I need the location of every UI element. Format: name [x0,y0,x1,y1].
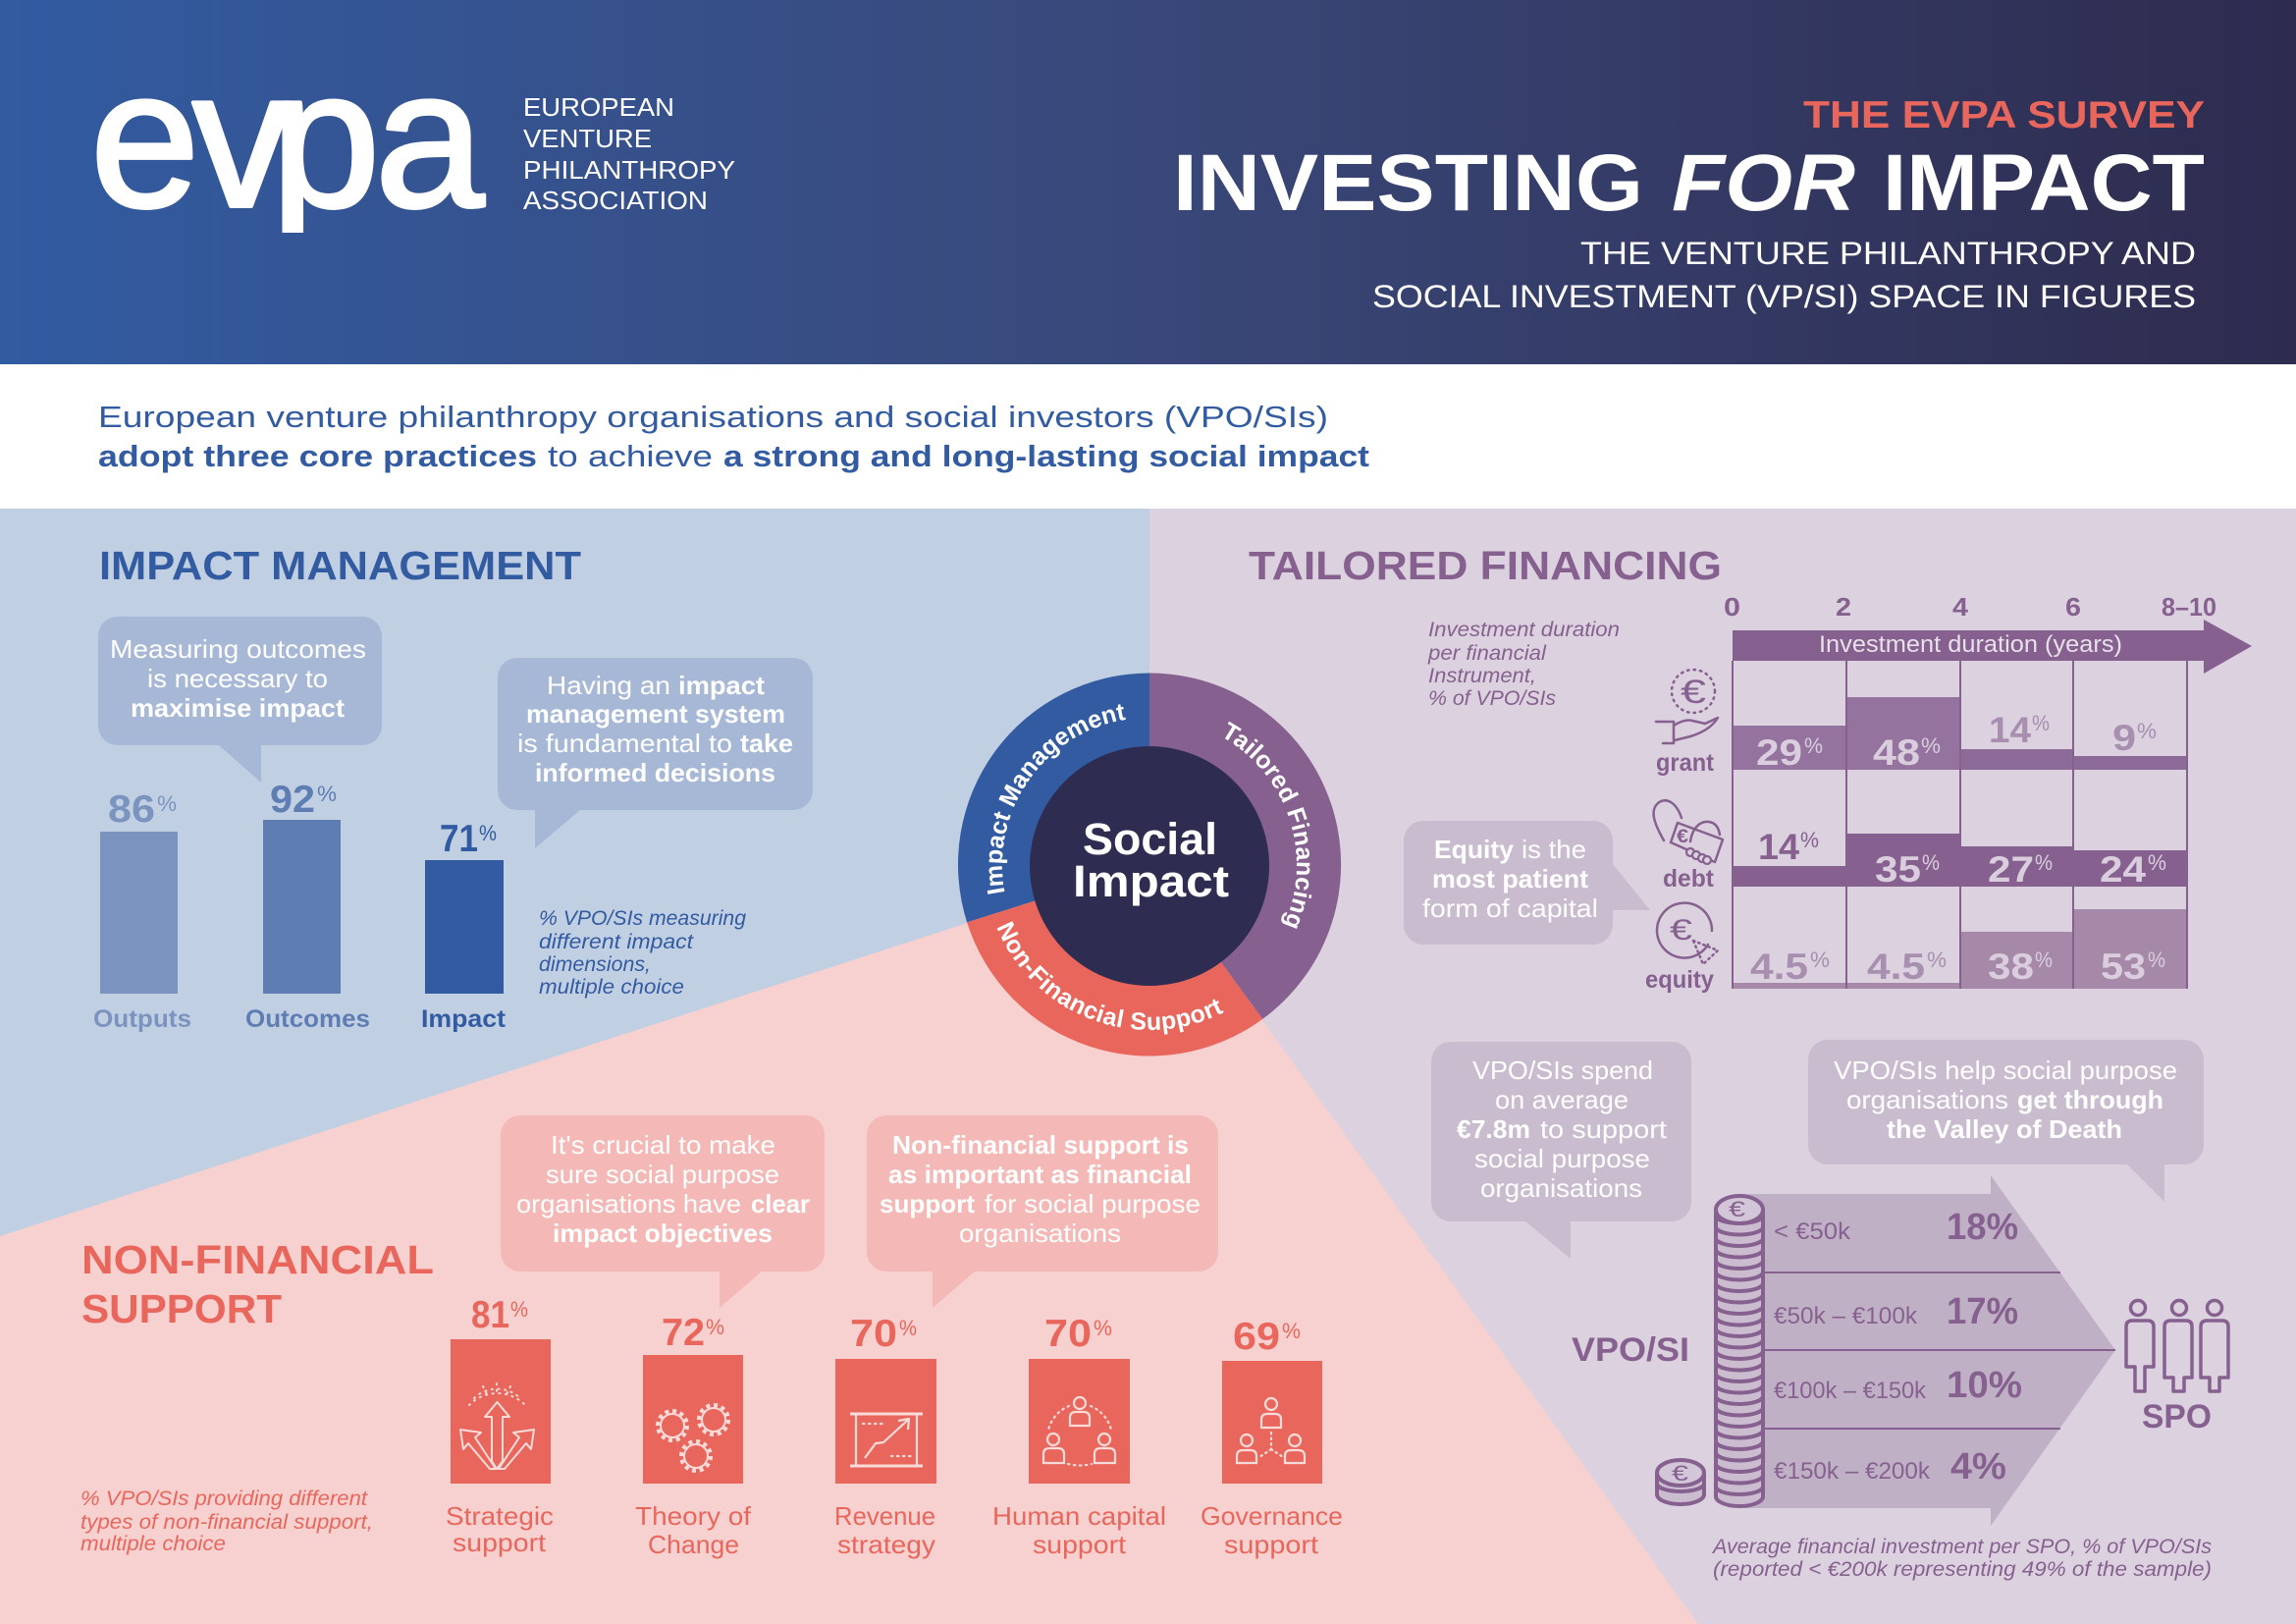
label: VPO/SI: VPO/SI [1572,1331,1689,1369]
callout: clear impact objectives: It's crucial to make [551,1130,775,1160]
heat table: duration by instrument: % [2148,850,2166,875]
heading: non-financial support: SUPPORT [81,1286,282,1331]
callout: equity patient capital: Equity [1434,835,1515,864]
bar: outputs 86%: 86 [108,788,155,831]
heading: tailored financing: TAILORED FINANCING [1249,543,1722,588]
heading: impact management: IMPACT MANAGEMENT [99,543,581,588]
callout: measuring outcomes: is necessary to [147,664,328,693]
callout: measuring outcomes: Measuring outcomes [110,634,366,664]
logo caption: VENTURE [523,124,652,153]
bar: outcomes 92% [245,779,370,1033]
chart note: multiple choice [539,976,684,999]
callout: non-financial importance: for social purpose [985,1189,1201,1218]
chart note: average investment: (reported < €200k representing 49% of the sample) [1713,1558,2212,1581]
centre: social impact [1030,746,1269,986]
callout: average spend: social purpose [1474,1144,1650,1173]
investment bands: €150k – €200k [1774,1458,1931,1485]
investment bands: €100k – €150k [1774,1378,1927,1404]
bar: theory of change 72%: Change [648,1530,739,1559]
heat table: duration by instrument: % [1922,850,1940,875]
logo caption: ASSOCIATION [523,186,708,215]
row label: grant [1656,670,1718,777]
bar chart: impact dimensions [93,779,507,1033]
header band [0,0,2296,364]
intro statement: to achieve [548,439,713,473]
ring segment: impact management: Impact Management [988,704,1126,894]
bar: revenue strategy 70%: strategy [837,1530,935,1559]
callout: average spend: organisations [1480,1173,1642,1203]
icon: tall coin stack [1716,1196,1763,1506]
values: equity: 38 [1988,947,2034,987]
icon: coin over hand: € [1681,674,1706,711]
bar: impact 71%: Impact [421,1005,507,1033]
bar: strategic support 81%: 81 [471,1294,509,1336]
heat table: duration by instrument: % [2137,719,2157,743]
callout: equity patient capital [1404,821,1650,945]
bar: human capital support 70%: 70 [1044,1313,1092,1355]
icon: governance hierarchy [1237,1398,1305,1463]
callout: impact management system: Having an [547,671,670,700]
heat table: duration by instrument: % [1800,828,1819,852]
heat table: duration by instrument [1733,661,2187,989]
arrow: investment duration [1733,620,2252,674]
subtitle: SOCIAL INVESTMENT (VP/SI) SPACE IN FIGURES [1372,279,2196,314]
callout: non-financial importance [867,1115,1218,1308]
row label: debt [1654,800,1723,893]
values: grant: 48 [1873,732,1920,773]
bar: governance support 69%: Governance [1201,1501,1343,1531]
callout: non-financial importance: as important as financial [888,1160,1192,1189]
values: grant: 9 [2112,718,2136,758]
callout: non-financial importance: Non-financial support is [892,1130,1189,1160]
intro statement: a strong and long-lasting social impact [723,439,1369,473]
bar: impact 71%: % [479,821,497,845]
subtitle: THE VENTURE PHILANTHROPY AND [1580,236,2196,271]
row fills: grant [1733,697,2187,770]
bar: strategic support 81% [446,1294,554,1557]
values: equity: 53 [2101,947,2146,987]
bar: governance support 69% [1201,1316,1343,1559]
table note: % of VPO/SIs [1428,687,1556,710]
callout: average spend: VPO/SIs spend [1472,1056,1653,1085]
intro statement [98,400,1369,473]
icon: euro pie: € [1670,914,1692,947]
chart note: multiple choice [80,1533,226,1555]
callout: average spend: to support [1540,1114,1668,1144]
icon: handshake with note: € [1677,827,1688,847]
logo: evpa wordmark: evpa [90,29,485,248]
callout: valley of death: organisations [1846,1085,2008,1114]
intro statement: European venture philanthropy organisations and social investors (VPO/SIs) [98,400,1328,434]
callout: clear impact objectives: impact objectives [553,1218,773,1248]
bar: human capital support 70%: % [1094,1316,1112,1340]
title: INVESTING [1173,138,1643,228]
investment bands [1774,1207,2022,1488]
row label: equity: equity [1645,966,1714,994]
values: debt: 35 [1875,849,1921,890]
ring segment: tailored financing [1149,674,1341,1019]
bar: human capital support 70%: support [1033,1530,1127,1559]
investment bands: < €50k [1774,1218,1851,1245]
chart note: average investment [1711,1536,2213,1581]
icon: gears [658,1405,728,1471]
table note: per financial [1427,642,1547,665]
bar: outputs 86%: Outputs [93,1005,191,1033]
callout: average spend: €7.8m [1457,1114,1530,1144]
icon: small coin stack: € [1672,1461,1688,1486]
icon: diverging arrows [460,1383,534,1469]
bar: strategic support 81%: Strategic [446,1501,554,1531]
values: debt [1758,827,2146,890]
values: equity: 4.5 [1750,947,1808,987]
panel: tailored financing [1149,509,2296,1624]
ring segment: non-financial support: Non-Financial Support [997,921,1224,1035]
bar: theory of change 72%: 72 [662,1312,705,1354]
arrow: investment size flow [1740,1175,2115,1526]
investment bands: 18% [1947,1207,2018,1248]
bar: outcomes 92%: 92 [270,779,315,821]
chart note [80,1488,373,1555]
callout: equity patient capital: most patient [1432,864,1588,893]
values: debt: 27 [1988,849,2034,890]
heat table: duration by instrument: % [1810,947,1830,972]
icon: small coin stack [1657,1460,1704,1504]
logo caption: PHILANTHROPY [523,155,735,185]
investment bands: 4% [1950,1446,2006,1488]
subtitle [1372,236,2196,314]
bar: revenue strategy 70% [834,1313,936,1559]
table note [1427,619,1620,710]
bar: theory of change 72% [635,1312,752,1559]
row fills: equity [1733,909,2187,989]
chart note: dimensions, [539,953,651,976]
callout: clear impact objectives: sure social purpose [546,1160,779,1189]
title [1173,138,2205,228]
callout: impact management system: take [740,729,793,758]
bar: governance support 69%: support [1224,1530,1319,1559]
panel: non-financial support [0,864,1698,1624]
bar: strategic support 81%: % [510,1297,528,1322]
heat table: duration by instrument: % [2148,947,2165,972]
duration axis labels: 2 [1836,592,1851,622]
values: debt: 14 [1758,827,1799,867]
values: grant [1756,710,2136,773]
callout: impact management system: informed decisions [535,758,775,787]
logo caption: EUROPEAN [523,92,674,122]
callout: impact management system [498,658,813,848]
row label: grant: grant [1656,749,1715,777]
callout: equity patient capital: form of capital [1422,893,1598,923]
bar: revenue strategy 70%: % [899,1316,917,1340]
arrow: investment duration: Investment duration (years) [1819,631,2122,658]
callout: valley of death [1808,1040,2204,1202]
title: FOR [1672,138,1855,228]
callout: non-financial importance: support [880,1189,975,1218]
callout: clear impact objectives: clear [751,1189,810,1218]
callout: valley of death: the Valley of Death [1887,1114,2122,1144]
chart note: % VPO/SIs measuring [539,907,746,930]
table note: Investment duration [1428,619,1620,641]
duration axis labels: 4 [1952,592,1969,622]
heading: non-financial support [81,1237,434,1331]
intro statement: adopt three core practices [98,439,537,473]
heat table: duration by instrument: % [1921,733,1941,758]
heat table: duration by instrument: % [1927,947,1947,972]
bar: outcomes 92%: Outcomes [245,1005,370,1033]
icon: three people [2126,1300,2228,1391]
icon: growth chart board [850,1414,923,1466]
callout: valley of death: get through [2017,1085,2163,1114]
centre: social impact: Impact [1073,856,1229,906]
row label: debt: debt [1663,865,1715,893]
bar: governance support 69%: % [1282,1319,1301,1343]
callout: clear impact objectives [501,1115,825,1308]
title: IMPACT [1883,138,2205,228]
logo caption [523,92,735,215]
heat table: duration by instrument: % [2035,947,2053,972]
chart note: different impact [539,931,694,953]
callout: average spend [1431,1042,1691,1259]
panel: impact management [0,509,1150,1240]
ring segment: tailored financing: Tailored Financing [1225,721,1311,929]
heat table: duration by instrument: % [2032,711,2050,735]
heat table: duration by instrument: % [2035,850,2053,875]
callout: impact management system: impact [678,671,765,700]
heat table: duration by instrument: % [1804,733,1823,758]
values: equity: 4.5 [1867,947,1925,987]
centre: social impact: Social [1083,814,1217,864]
label: SPO: SPO [2142,1398,2212,1435]
icon: tall coin stack: € [1729,1197,1745,1221]
callout: impact management system: is fundamental to [517,729,732,758]
bar: revenue strategy 70%: 70 [850,1313,897,1355]
icon: people circle [1043,1397,1115,1465]
bar: outputs 86% [93,788,191,1033]
bar: outcomes 92%: % [317,782,337,806]
duration axis labels: 6 [2065,592,2081,622]
heading: non-financial support: NON-FINANCIAL [81,1237,434,1282]
bar: impact 71% [421,818,507,1033]
row label: equity [1645,903,1718,994]
ring segment: non-financial support [967,901,1262,1056]
chart note [539,907,746,999]
bar: impact 71%: 71 [440,818,478,860]
chart note: % VPO/SIs providing different [80,1488,368,1510]
duration axis labels [1724,592,2216,622]
callout: average spend: on average [1495,1085,1629,1114]
values: debt: 24 [2100,849,2146,890]
callout: measuring outcomes [98,617,382,783]
duration axis labels: 8–10 [2162,592,2216,622]
investment bands: 10% [1947,1365,2022,1406]
bar: governance support 69%: 69 [1233,1316,1280,1358]
values: grant: 29 [1756,732,1802,773]
ring segment: impact management [958,674,1149,923]
values: equity [1750,947,2146,987]
duration axis labels: 0 [1724,592,1740,622]
survey label: THE EVPA SURVEY [1803,94,2205,136]
bar: theory of change 72%: % [706,1315,724,1339]
row fills: debt [1733,834,2187,887]
bar: revenue strategy 70%: Revenue [834,1501,935,1531]
investment bands: 17% [1947,1291,2018,1332]
investment bands: €50k – €100k [1774,1303,1918,1329]
callout: equity patient capital: is the [1522,835,1586,864]
bar: human capital support 70%: Human capital [992,1501,1166,1531]
chart note: types of non-financial support, [80,1511,373,1534]
chart: social impact ring [958,674,1341,1056]
table note: Instrument, [1428,665,1536,687]
bar: outputs 86%: % [157,791,177,816]
callout: impact management system: management system [526,699,785,729]
values: grant: 14 [1989,710,2031,750]
callout: clear impact objectives: organisations have [516,1189,741,1218]
bar: human capital support 70% [992,1313,1166,1559]
chart note: average investment: Average financial investment per SPO, % of VPO/SIs [1711,1536,2213,1558]
callout: valley of death: VPO/SIs help social purpose [1834,1056,2177,1085]
callout: measuring outcomes: maximise impact [131,693,345,723]
bar: strategic support 81%: support [453,1528,547,1557]
bar: theory of change 72%: Theory of [635,1501,752,1531]
callout: non-financial importance: organisations [959,1218,1121,1248]
